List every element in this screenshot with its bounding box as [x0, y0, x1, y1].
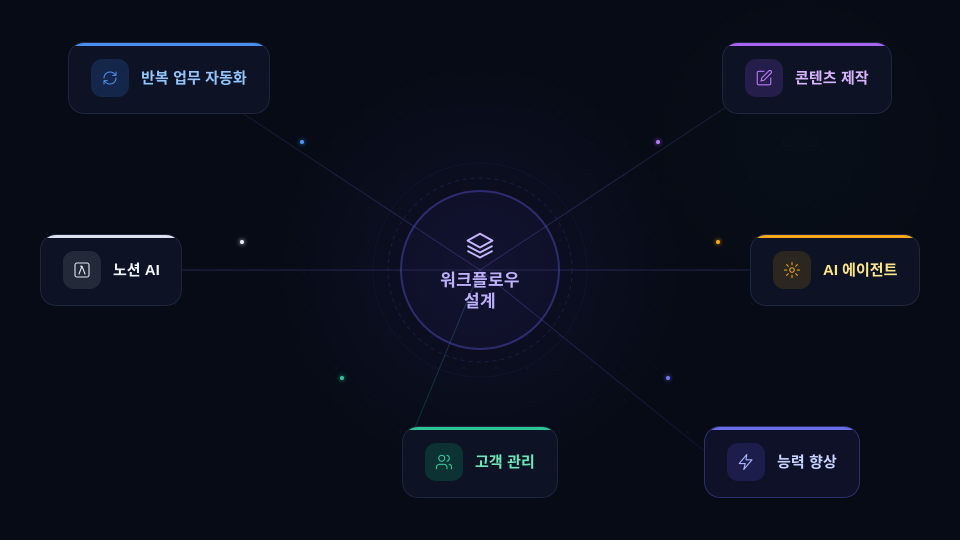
heading: workflow design: 워크플로우 — [440, 271, 520, 290]
particle: blue — [300, 140, 304, 144]
icon: lightning bolt — [727, 443, 765, 481]
panel: content creation — [722, 42, 892, 114]
particle: purple — [656, 140, 660, 144]
icon: lambda square — [63, 251, 101, 289]
label: 능력 향상 — [777, 454, 837, 470]
label: 노션 AI — [113, 262, 160, 278]
panel: capability improvement — [704, 426, 860, 498]
icon: refresh — [91, 59, 129, 97]
particle: indigo — [666, 376, 670, 380]
icon: pencil square — [745, 59, 783, 97]
panel: customer management — [402, 426, 558, 498]
label: 콘텐츠 제작 — [795, 70, 869, 86]
particle: green — [340, 376, 344, 380]
heading: workflow design — [440, 271, 520, 311]
particle: white — [240, 240, 244, 244]
icon: users — [425, 443, 463, 481]
central hub circle — [400, 190, 560, 350]
particle: amber — [716, 240, 720, 244]
icon: sun — [773, 251, 811, 289]
panel: repetitive task automation — [68, 42, 270, 114]
label: 고객 관리 — [475, 454, 535, 470]
panel: AI agent — [750, 234, 920, 306]
label: AI 에이전트 — [823, 262, 897, 278]
icon: layers — [466, 232, 494, 258]
label: 반복 업무 자동화 — [141, 70, 247, 86]
heading: workflow design: 설계 — [464, 292, 496, 311]
panel: Notion AI — [40, 234, 182, 306]
